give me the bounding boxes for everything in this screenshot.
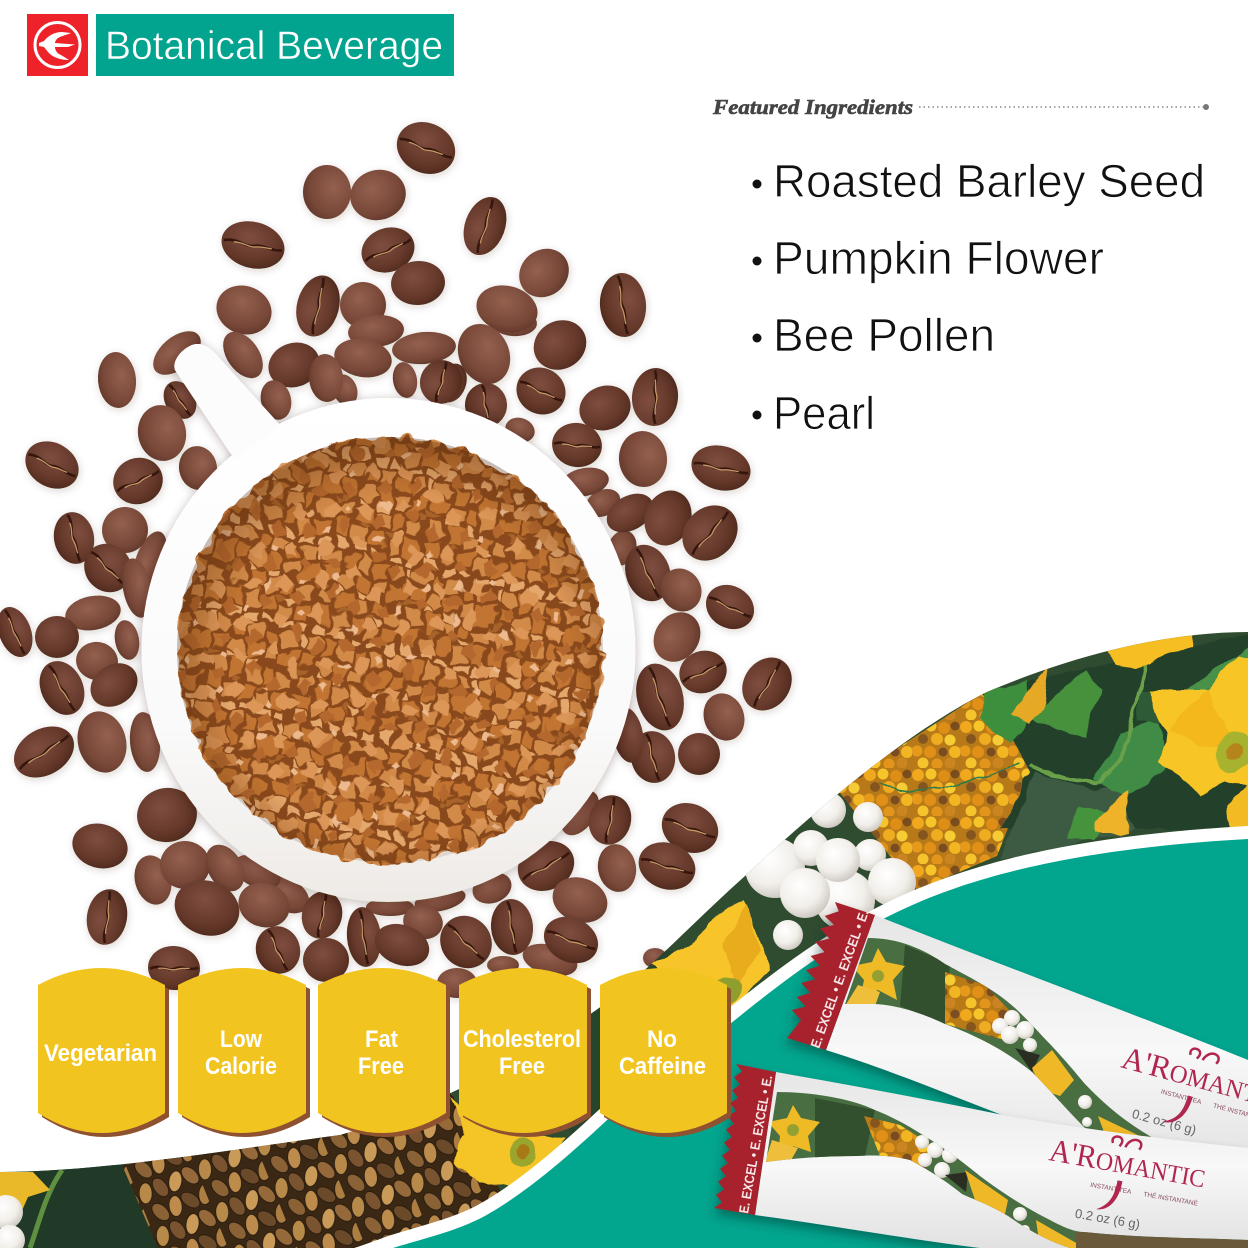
product sachet back — [783, 902, 1248, 1148]
badge: no caffeine — [600, 968, 731, 1137]
product sachet front — [714, 1064, 1248, 1248]
sachet red seal — [714, 1064, 776, 1215]
sachet brand label: 0.2 oz (6 g) — [1131, 1106, 1198, 1138]
sachet photo window — [760, 1085, 1248, 1248]
ingredient list: Pumpkin Flower — [773, 232, 1104, 284]
green leaves and vine — [880, 632, 1248, 860]
badge: fat free — [318, 968, 450, 1137]
ingredient list: Bee Pollen — [773, 309, 995, 361]
ingredient list — [752, 155, 1205, 439]
featured ingredients heading: Featured Ingredients — [712, 95, 913, 119]
sachet photo window — [845, 938, 1152, 1137]
botanical photo band — [0, 620, 1248, 1248]
title banner — [96, 14, 454, 76]
sachet brand label: THÉ INSTANTANÉ — [1143, 1189, 1199, 1208]
badge: low calorie — [178, 968, 310, 1137]
pumpkin flower lower — [449, 1096, 566, 1185]
title banner: Botanical Beverage — [105, 24, 443, 68]
pumpkin flower upper right — [1008, 628, 1248, 832]
badge: vegetarian — [38, 968, 169, 1137]
bee pollen — [836, 690, 1030, 890]
sachet brand label — [1107, 1031, 1248, 1157]
sachet brand label: INSTANT TEA — [1160, 1089, 1203, 1106]
badge: cholesterol free: Free — [499, 1053, 545, 1080]
badge: cholesterol free: Cholesterol — [463, 1026, 581, 1053]
barley seeds — [122, 1090, 505, 1248]
coffee beans scatter — [0, 113, 802, 998]
sachet brand label: A'ROMANTIC — [1047, 1131, 1209, 1194]
badge: fat free: Fat — [365, 1026, 398, 1053]
teal curved panel with white edge — [320, 838, 1248, 1248]
instant coffee granules — [177, 437, 603, 863]
badge: cholesterol free — [459, 968, 591, 1137]
badge: low calorie: Calorie — [205, 1053, 277, 1080]
badge: no caffeine: Caffeine — [619, 1053, 706, 1080]
logo: E. Excel swallow — [27, 14, 88, 76]
ingredient list: Roasted Barley Seed — [773, 155, 1205, 207]
sachet brand label: 0.2 oz (6 g) — [1074, 1206, 1141, 1232]
dark foliage middle — [570, 950, 670, 1134]
badge: fat free: Free — [358, 1053, 404, 1080]
pumpkin flower middle — [648, 900, 772, 1010]
dark leaf patch bottom left — [0, 1165, 165, 1248]
sachet brand label: INSTANT TEA — [1090, 1182, 1132, 1196]
pearls — [745, 792, 916, 950]
sachet brand label — [1038, 1125, 1210, 1242]
sachet red seal: E. EXCEL • E. EXCEL • E. — [736, 1074, 775, 1215]
featured ingredients heading — [712, 95, 1209, 119]
badge: no caffeine: No — [647, 1026, 677, 1053]
ingredient list: Pearl — [773, 387, 875, 439]
white cup with handle — [142, 344, 636, 902]
badge: low calorie: Low — [220, 1026, 262, 1053]
sachet red seal: E. EXCEL • E. EXCEL • E. — [808, 908, 872, 1050]
badge: vegetarian: Vegetarian — [44, 1040, 157, 1067]
